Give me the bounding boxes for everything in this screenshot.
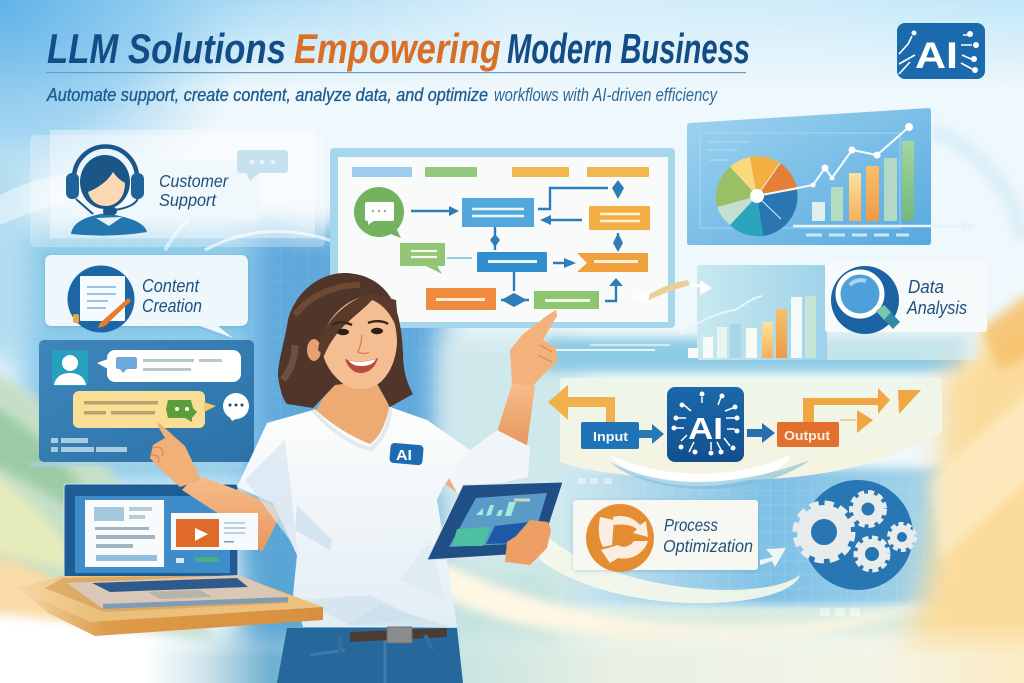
shirt bbox=[237, 407, 470, 628]
pants bbox=[277, 628, 463, 683]
output box bbox=[777, 422, 839, 447]
AI chip: AI bbox=[688, 411, 723, 446]
speech bubble bbox=[237, 150, 288, 181]
neck bbox=[316, 378, 389, 444]
label: Process bbox=[664, 515, 718, 535]
title part: Empowering: Empowering bbox=[294, 25, 501, 72]
laptop screen bbox=[64, 484, 238, 578]
small bar chart bbox=[680, 296, 816, 358]
arrow: small triangle bbox=[857, 410, 873, 433]
left hand bbox=[150, 421, 201, 487]
orange box bottom bbox=[426, 288, 496, 310]
label: Analysis bbox=[906, 298, 967, 318]
blue box bbox=[462, 198, 534, 227]
orange box bbox=[589, 206, 650, 230]
green chat node bbox=[354, 187, 404, 238]
card bbox=[573, 500, 758, 570]
subtitle: Automate support, create content, analyze data, and optimize bbox=[46, 85, 488, 105]
right hand pointing bbox=[510, 310, 557, 386]
arrow: orange up right bbox=[803, 388, 890, 422]
label bbox=[142, 276, 202, 316]
arrow bbox=[747, 423, 775, 443]
card bbox=[45, 255, 248, 338]
arrow: triangle bbox=[898, 390, 921, 414]
icon: AI logo: AI bbox=[915, 35, 958, 76]
white message bubble bbox=[97, 350, 241, 382]
label: Customer bbox=[159, 171, 229, 191]
title part: Modern Business: Modern Business bbox=[507, 25, 750, 72]
gears circle bbox=[796, 480, 915, 590]
panel: data analysis bbox=[660, 262, 987, 360]
laptop base bbox=[67, 575, 288, 609]
belt bbox=[340, 627, 447, 652]
desk and laptop base bbox=[17, 575, 323, 636]
arrow: head on swoosh bbox=[632, 290, 650, 304]
axis labels bbox=[806, 234, 909, 236]
trend line bbox=[757, 123, 913, 196]
card bbox=[130, 160, 260, 220]
label: Creation bbox=[142, 296, 202, 316]
yellow message bubble bbox=[73, 391, 216, 428]
arrow bbox=[760, 548, 786, 567]
desk bbox=[17, 575, 323, 636]
output box: Output bbox=[784, 428, 831, 443]
icon: chat bubble bbox=[223, 393, 249, 421]
dark blue box bbox=[477, 252, 547, 272]
title underline bbox=[46, 72, 746, 73]
pie chart bbox=[716, 156, 798, 236]
avatar bbox=[52, 350, 88, 386]
header bars bbox=[352, 167, 649, 177]
subtitle: workflows with AI-driven efficiency bbox=[494, 85, 718, 105]
label: Support bbox=[159, 190, 217, 210]
flowchart panel bbox=[330, 148, 675, 328]
arrow: orange left bbox=[548, 385, 615, 422]
tablet bbox=[427, 482, 563, 560]
right hand holding tablet bbox=[505, 520, 551, 565]
callout: content creation bbox=[45, 255, 248, 338]
icon: cycle arrows bbox=[586, 504, 654, 572]
dashboard panel bbox=[687, 108, 978, 245]
AI badge bbox=[389, 443, 424, 465]
person: woman presenting bbox=[150, 273, 563, 683]
label bbox=[663, 515, 753, 556]
arrow bbox=[639, 424, 664, 444]
decorative pixels bbox=[578, 478, 860, 616]
video card bbox=[171, 513, 258, 550]
face bbox=[307, 293, 399, 389]
status bars bbox=[51, 438, 127, 452]
panel: AI input output bbox=[548, 378, 942, 489]
title part: LLM Solutions: LLM Solutions bbox=[47, 25, 286, 72]
forearm bbox=[497, 384, 535, 445]
panel: process optimization bbox=[540, 480, 915, 603]
input box bbox=[581, 422, 639, 449]
right upper arm bbox=[440, 440, 500, 495]
callout: customer support bbox=[66, 147, 288, 236]
arrow bbox=[660, 280, 712, 295]
input box: Input bbox=[593, 429, 629, 444]
label: Optimization bbox=[663, 536, 753, 556]
title bbox=[47, 25, 750, 72]
arrow: into small chart bbox=[555, 345, 670, 350]
right sleeve bbox=[445, 430, 530, 493]
AI chip bbox=[667, 387, 744, 462]
axis arrow bbox=[793, 221, 978, 231]
panel: translucent left backdrop bbox=[0, 130, 390, 275]
bar chart bbox=[812, 141, 914, 221]
orange chevron bbox=[577, 253, 648, 272]
arrow: swoosh into flowchart bbox=[640, 280, 690, 302]
icon: magnifier bbox=[831, 266, 900, 334]
label: Content bbox=[142, 276, 200, 296]
green box bottom bbox=[534, 291, 599, 309]
icon: document and pen bbox=[68, 266, 134, 332]
icon: headset agent bbox=[66, 147, 147, 236]
connectors and arrows bbox=[411, 188, 618, 301]
left arm bbox=[150, 421, 283, 552]
label bbox=[159, 171, 229, 210]
label: Data bbox=[908, 277, 944, 297]
panel: chat window bbox=[30, 340, 254, 467]
green speech node bbox=[400, 243, 445, 274]
label bbox=[906, 277, 967, 318]
AI badge: AI bbox=[396, 447, 412, 464]
icon: AI logo bbox=[897, 23, 985, 79]
hair back bbox=[278, 273, 413, 408]
